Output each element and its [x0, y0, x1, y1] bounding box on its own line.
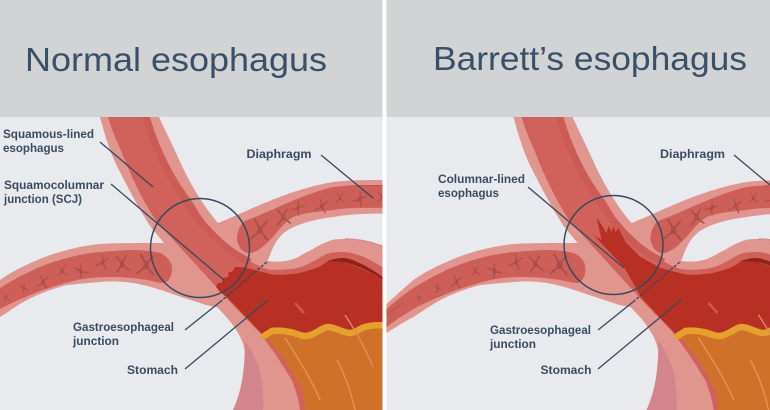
label: Columnar-lined esophagus: esophagus [438, 188, 499, 200]
label: Diaphragm [246, 149, 373, 198]
circle highlight [150, 198, 250, 298]
diagram: normal esophagus anatomy [0, 117, 400, 410]
label: Columnar-lined esophagus: Columnar-lined [438, 174, 525, 186]
label: Diaphragm: Diaphragm [246, 149, 312, 161]
panel background: Barrett's [386, 117, 770, 410]
header band: Barrett's [386, 0, 770, 117]
label: Gastroesophageal junction: Gastroesophageal [490, 325, 591, 337]
label: Gastroesophageal junction: junction [72, 336, 119, 348]
panel: Barrett's esophagus [374, 0, 770, 410]
header band: normal [0, 0, 382, 117]
label: Stomach [127, 300, 268, 377]
label: Diaphragm: Diaphragm [660, 149, 725, 161]
panel background: normal [0, 117, 382, 410]
label: Gastroesophageal junction: Gastroesophageal [73, 322, 174, 334]
label: Squamocolumnar junction: Squamocolumnar [4, 180, 105, 192]
circle highlight [564, 196, 663, 294]
label: Columnar-lined esophagus [438, 174, 624, 268]
heading: Normal esophagus: Normal esophagus [25, 41, 327, 78]
label: Squamous-lined esophagus: esophagus [3, 143, 64, 155]
label: Stomach: Stomach [540, 365, 592, 377]
label: Gastroesophageal junction [72, 261, 268, 348]
label: Squamous-lined esophagus: Squamous-lined [3, 129, 94, 141]
label: Gastroesophageal junction [489, 261, 681, 351]
diagram: Barrett's esophagus anatomy [374, 117, 770, 410]
panel: normal esophagus [0, 0, 400, 410]
heading: Barrett's esophagus: Barrett’s esophagus [433, 40, 747, 77]
label: Stomach [540, 300, 681, 377]
label: Stomach: Stomach [127, 365, 178, 377]
label: Squamocolumnar junction: junction (SCJ) [3, 194, 82, 206]
label: Squamous-lined esophagus [3, 129, 153, 187]
label: Diaphragm [660, 149, 770, 185]
label: Gastroesophageal junction: junction [489, 339, 536, 351]
label: Squamocolumnar junction [3, 180, 224, 280]
